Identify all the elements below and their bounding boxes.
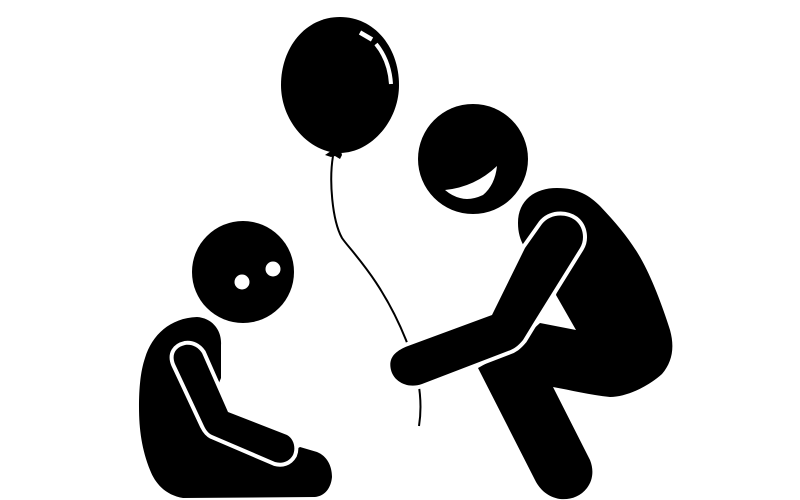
child arm with white outline — [174, 345, 294, 463]
child head with eyes — [192, 221, 294, 323]
child body — [139, 317, 332, 498]
adult arm with white outline — [390, 215, 583, 386]
adult head with smile — [418, 104, 528, 214]
figure: adult — [390, 104, 672, 499]
icon: balloon — [281, 17, 421, 426]
adult body and legs — [478, 188, 672, 499]
figure: child — [139, 221, 332, 498]
